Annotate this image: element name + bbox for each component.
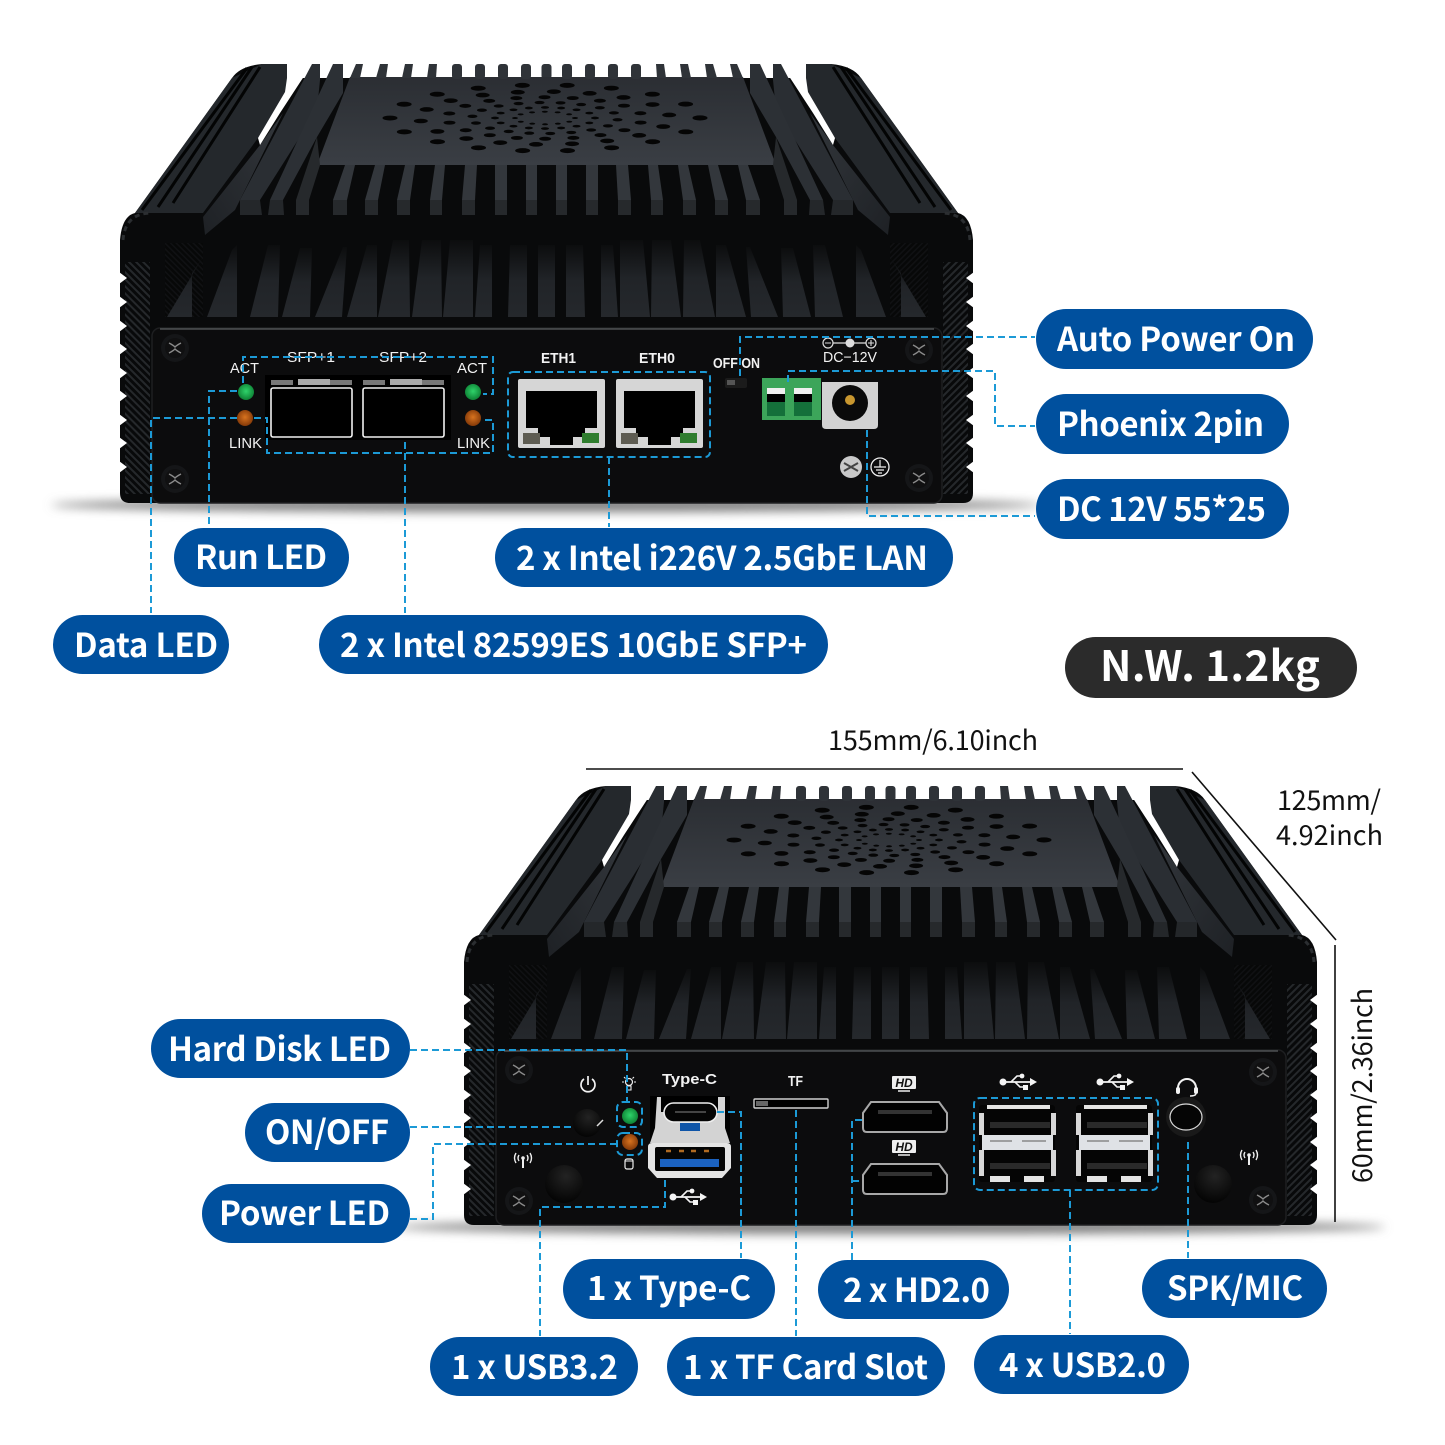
Phoenix 2pin green connector bbox=[762, 378, 821, 420]
SFP and LED small labels: SFP+1 bbox=[287, 350, 335, 366]
power button and icon bbox=[573, 1076, 603, 1137]
Type-C port: Type-C bbox=[662, 1072, 718, 1088]
label: Data LED: Data LED bbox=[74, 619, 218, 667]
label: Hard Disk LED: Hard Disk LED bbox=[168, 1023, 391, 1071]
SFP+ cage and ports bbox=[265, 375, 451, 440]
USB 3.2 port bbox=[648, 1143, 731, 1178]
label: 1 x USB3.2 bbox=[430, 1337, 638, 1396]
dimension: depth: 125mm/ bbox=[1277, 779, 1381, 818]
device: bottom view with IO ports bbox=[395, 786, 1385, 1234]
callout lines: top device bbox=[151, 337, 1035, 613]
HD ports and icons bbox=[863, 1076, 947, 1194]
DC jack bbox=[822, 382, 878, 429]
label: 2 x Intel 82599ES 10GbE SFP+: 2 x Intel 82599ES 10GbE SFP+ bbox=[340, 619, 807, 667]
SFP and LED small labels: LINK bbox=[229, 436, 262, 452]
label: Run LED: Run LED bbox=[195, 531, 327, 579]
ethernet ports ETH1 and ETH0: ETH0 bbox=[639, 351, 675, 367]
Type-C port bbox=[650, 1072, 730, 1144]
callout lines: bottom device bbox=[410, 1050, 1188, 1336]
label: 4 x USB2.0 bbox=[974, 1335, 1189, 1394]
SFP LED indicators bbox=[237, 384, 481, 426]
weight badge: N.W. 1.2kg bbox=[1100, 633, 1320, 694]
SFP and LED small labels: ACT bbox=[230, 361, 259, 377]
label: Power LED bbox=[202, 1184, 410, 1243]
dimension: height: 60mm/2.36inch bbox=[1341, 988, 1380, 1183]
TF card slot: TF bbox=[788, 1074, 803, 1090]
label: 1 x TF Card Slot: 1 x TF Card Slot bbox=[683, 1341, 928, 1389]
label: DC 12V 55*25 bbox=[1036, 479, 1289, 539]
icon: usb for USB 3.2 bbox=[670, 1189, 707, 1205]
dimension: depth: 4.92inch bbox=[1276, 814, 1383, 853]
label: ON/OFF: ON/OFF bbox=[265, 1106, 389, 1154]
device: top view with network ports bbox=[51, 64, 1041, 512]
ground screw and symbol bbox=[840, 456, 889, 478]
ethernet ports ETH1 and ETH0 bbox=[518, 351, 703, 448]
audio jack and icon bbox=[1166, 1079, 1206, 1137]
SFP and LED small labels: ACT bbox=[457, 361, 487, 377]
auto power switch bbox=[713, 356, 760, 388]
dimension: width: 155mm/6.10inch bbox=[828, 719, 1038, 758]
SFP and LED small labels bbox=[229, 350, 490, 452]
label: Auto Power On bbox=[1036, 309, 1313, 369]
label: Run LED bbox=[174, 528, 349, 587]
SFP and LED small labels: LINK bbox=[457, 436, 490, 452]
label: Data LED bbox=[53, 615, 229, 674]
label: SPK/MIC bbox=[1142, 1259, 1327, 1318]
label: Auto Power On: Auto Power On bbox=[1056, 313, 1295, 361]
SFP and LED small labels: SFP+2 bbox=[379, 350, 427, 366]
label: 1 x USB3.2: 1 x USB3.2 bbox=[451, 1341, 618, 1389]
label: 2 x HD2.0 bbox=[818, 1260, 1009, 1319]
label: SPK/MIC: SPK/MIC bbox=[1167, 1262, 1303, 1310]
dimension: depth bbox=[1192, 772, 1383, 940]
DC polarity label: DC−12V bbox=[823, 350, 877, 366]
auto power switch: OFF ON bbox=[713, 356, 760, 372]
label: Power LED: Power LED bbox=[219, 1187, 390, 1235]
label: Phoenix 2pin bbox=[1036, 394, 1289, 454]
label: ON/OFF bbox=[245, 1103, 410, 1162]
antenna caps and wifi icons bbox=[514, 1150, 1258, 1203]
label: Phoenix 2pin: Phoenix 2pin bbox=[1057, 398, 1264, 446]
USB 2.0 quad ports bbox=[979, 1074, 1153, 1182]
label: 2 x HD2.0: 2 x HD2.0 bbox=[843, 1264, 990, 1312]
label: 1 x Type-C bbox=[563, 1259, 775, 1319]
TF card slot bbox=[754, 1074, 828, 1108]
label: DC 12V 55*25: DC 12V 55*25 bbox=[1057, 483, 1266, 531]
label: 2 x Intel i226V 2.5GbE LAN: 2 x Intel i226V 2.5GbE LAN bbox=[516, 532, 928, 580]
DC polarity label bbox=[823, 338, 877, 366]
ethernet ports ETH1 and ETH0: ETH1 bbox=[541, 351, 576, 367]
label: 4 x USB2.0: 4 x USB2.0 bbox=[999, 1339, 1166, 1387]
label: 1 x Type-C: 1 x Type-C bbox=[587, 1262, 751, 1310]
status LEDs and icons bbox=[622, 1077, 638, 1169]
